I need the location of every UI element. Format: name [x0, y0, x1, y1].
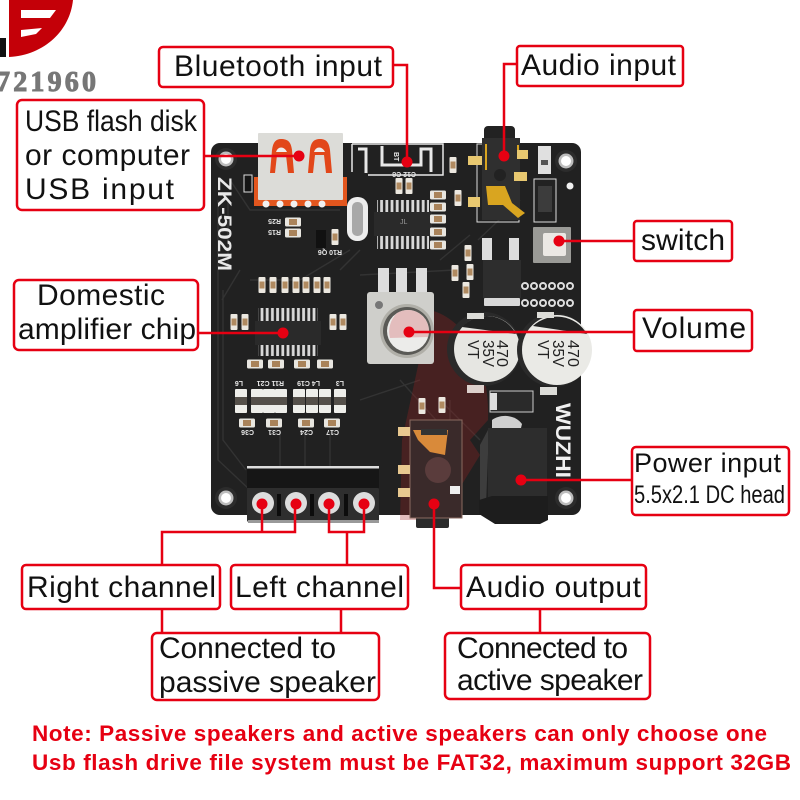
- connector: Power input: [516, 474, 632, 486]
- mounting holes: [215, 148, 577, 509]
- label: Bluetooth input: Bluetooth input: [174, 50, 383, 83]
- electrolytic capacitor right: [517, 312, 592, 395]
- label: USB flash disk or computer USB input: or computer: [25, 139, 190, 172]
- output capacitors: C31: [268, 428, 281, 435]
- small resistors near USB: R15: [268, 228, 281, 235]
- silkscreen BT C12 C8: BT: [392, 152, 399, 162]
- label: Volume: Volume: [642, 312, 746, 345]
- label: Audio input: Audio input: [521, 49, 677, 82]
- electrolytic capacitor left: VT: [464, 340, 481, 359]
- label: Audio output: Audio output: [466, 571, 642, 604]
- connector: USB input: [204, 150, 304, 162]
- electrolytic capacitor right: VT: [534, 340, 551, 359]
- capacitors around amplifier chip: L3: [336, 379, 344, 386]
- silkscreen BT C12 C8: [392, 152, 416, 177]
- label: Connected to active speaker: active speaker: [457, 664, 643, 697]
- amplifier chip: [255, 308, 321, 356]
- connector: Bluetooth input: [393, 65, 412, 168]
- header pads: [522, 283, 573, 306]
- regulator U1: [452, 238, 521, 306]
- audio input jack: [468, 126, 528, 222]
- capacitors around amplifier chip: [230, 277, 346, 386]
- faint red watermark: [400, 310, 488, 520]
- label: USB flash disk or computer USB input: USB input: [25, 173, 175, 206]
- label: Connected to active speaker: [445, 632, 650, 699]
- diode below capacitors: [490, 391, 533, 412]
- electrolytic capacitor left: 470: [493, 340, 510, 367]
- note text: [32, 721, 791, 775]
- small resistors near USB: R10 Q6: [318, 248, 342, 255]
- LED D1: [538, 146, 551, 174]
- USB connector: [244, 133, 347, 208]
- label: Domestic amplifier chip: Domestic: [37, 279, 165, 312]
- note text: Usb flash drive file system must be FAT32, maximum support 32GB: [32, 750, 791, 775]
- output capacitors: [239, 418, 340, 435]
- connector: Volume: [404, 326, 634, 338]
- label: USB flash disk or computer USB input: [17, 100, 204, 210]
- note text: Note: Passive speakers and active speakers can only choose one: [32, 721, 767, 746]
- audio output jack: [398, 420, 462, 528]
- label: Connected to passive speaker: [152, 632, 379, 700]
- capacitors around amplifier chip: L4 C19: [297, 379, 320, 386]
- power jack: [479, 416, 548, 524]
- capacitors column: [396, 157, 462, 250]
- label: Domestic amplifier chip: amplifier chip: [18, 313, 196, 346]
- electrolytic capacitor right: 35V: [549, 340, 566, 367]
- silkscreen model name: ZK-502M: [213, 177, 234, 271]
- output capacitors: C36: [241, 428, 254, 435]
- diode D4: [534, 179, 574, 222]
- circuit board ZK-502M: [211, 126, 592, 528]
- label: Right channel: Right channel: [27, 571, 216, 604]
- push switch: [533, 227, 571, 263]
- terminal block: [247, 466, 379, 523]
- output capacitors: C24: [300, 428, 313, 435]
- crystal oscillator: [347, 197, 368, 241]
- label: switch: switch: [641, 224, 725, 257]
- label: Connected to passive speaker: Connected to: [159, 632, 336, 665]
- connector: Right channel: [162, 498, 302, 633]
- label: Domestic amplifier chip: [14, 279, 198, 350]
- silkscreen brand name: WUZHI: [551, 403, 574, 478]
- Bluetooth chip: JL: [400, 219, 408, 226]
- label: Power input 5.5x2.1 DC head: [632, 447, 789, 515]
- Bluetooth chip: [374, 200, 432, 249]
- circuit traces: [218, 180, 520, 490]
- silkscreen BT C12 C8: C12 C8: [392, 170, 416, 177]
- connector: Audio output: [428, 498, 540, 633]
- connector: switch: [554, 236, 634, 246]
- label: Left channel: Left channel: [235, 571, 404, 604]
- small resistors near USB: R25: [268, 217, 281, 224]
- capacitors around amplifier chip: R11 C21: [257, 379, 284, 386]
- label: USB flash disk or computer USB input: USB flash disk: [25, 105, 198, 138]
- logo: red shield mark and id number: [0, 0, 96, 98]
- connector: Audio input: [498, 64, 517, 162]
- inductors: [235, 389, 346, 413]
- capacitors around amplifier chip: L6: [235, 379, 243, 386]
- electrolytic capacitor right: 470: [564, 340, 581, 367]
- electrolytic capacitor left: [447, 312, 521, 393]
- label: Connected to passive speaker: passive speaker: [159, 666, 376, 699]
- Bluetooth antenna: [352, 144, 443, 175]
- board substrate: [211, 143, 581, 515]
- output capacitors: C17: [326, 428, 339, 435]
- label: Connected to active speaker: Connected to: [457, 632, 628, 665]
- connector: amplifier chip: [198, 328, 288, 338]
- electrolytic capacitor left: 35V: [479, 340, 496, 367]
- small capacitors C44 C45: [418, 397, 446, 414]
- small resistors near USB: [268, 217, 342, 255]
- label: Power input 5.5x2.1 DC head: Power input: [634, 448, 781, 478]
- potentiometer: [367, 268, 434, 364]
- connector: Left channel: [324, 498, 370, 633]
